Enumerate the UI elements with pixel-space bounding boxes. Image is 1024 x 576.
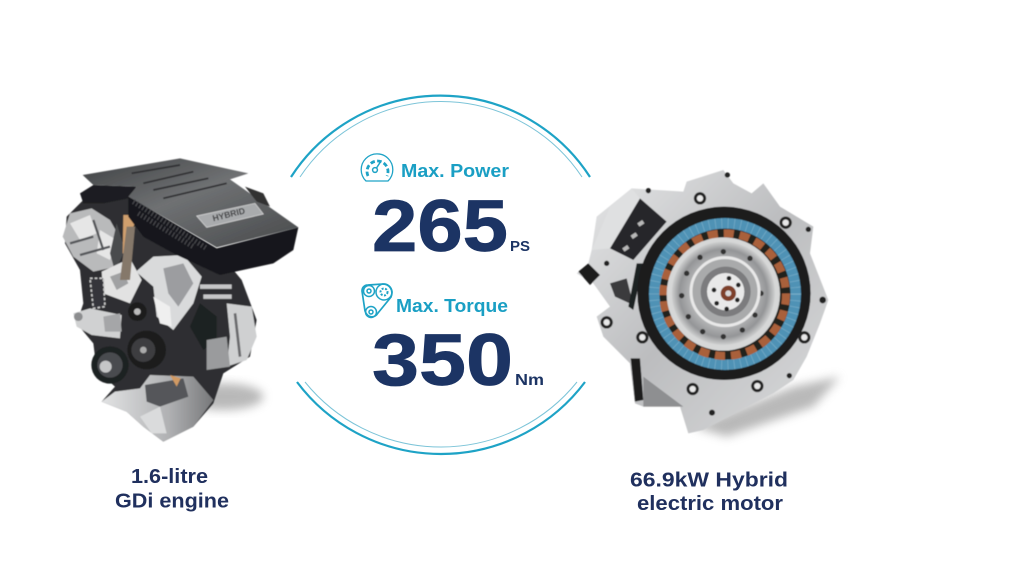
label: motor: electric motor [637,493,783,515]
image: electric motor [577,170,840,437]
hybrid badge [197,203,263,227]
number: 265 PS: PS [510,238,530,255]
alternator [102,375,213,442]
icon: speedometer [361,154,393,181]
cover top [83,158,298,247]
image: engine: HYBRID [211,206,246,223]
motor housing [577,170,828,433]
number: 265 PS: 265 [372,186,508,267]
cover underside [80,185,137,203]
cover front [128,197,298,275]
top arc [291,96,590,177]
image: engine [63,158,298,442]
icon: belt and pulleys [362,284,392,318]
centre brackets [102,258,142,303]
engine body [65,197,257,442]
label: engine [115,466,229,512]
heading: max power: Max. Power [401,160,509,181]
label: engine: 1.6-litre [131,466,208,488]
label: engine: GDi engine [115,490,229,512]
pipes and right side [200,287,232,297]
pulleys [91,346,129,384]
mounting bolts [602,194,809,394]
bottom arc [297,382,585,454]
copper coils [663,233,786,356]
label: motor: 66.9kW Hybrid [630,470,788,492]
stator ring [637,207,811,380]
number: 350 Nm: 350 [372,320,513,401]
left valve housing [63,208,125,272]
label: motor [630,470,788,515]
rotor disc [667,237,780,351]
heading: max torque: Max. Torque [396,295,508,316]
number: 350 Nm: Nm [515,372,544,389]
